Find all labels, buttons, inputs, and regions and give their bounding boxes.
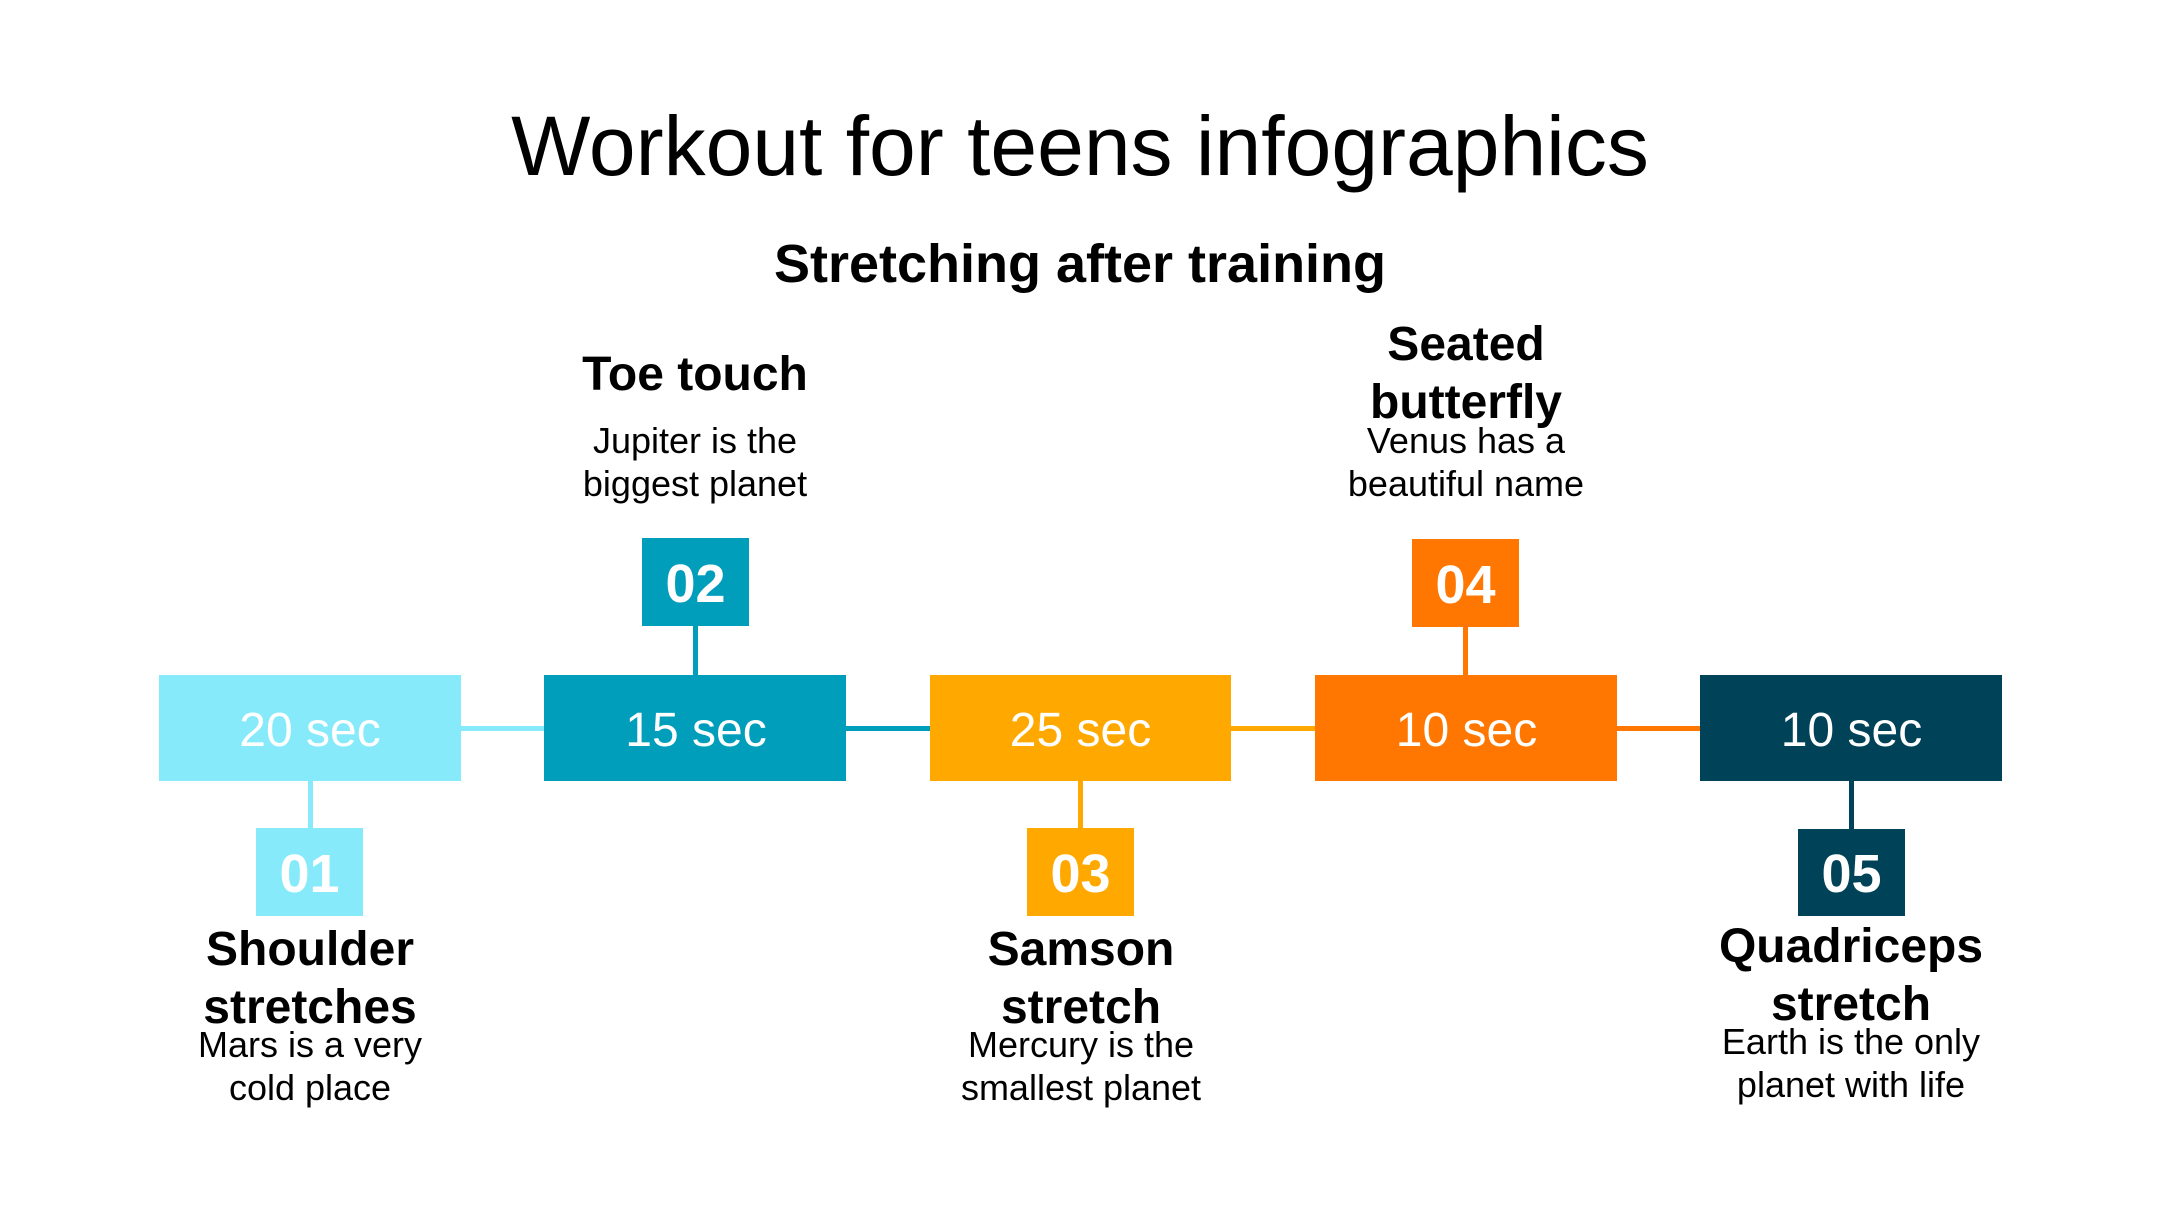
number box: 04: 04 — [1435, 555, 1496, 615]
connector: step 3 to step 4 — [1231, 726, 1315, 730]
text: jupiter: Jupiter is the — [593, 420, 797, 461]
connector: duration to number 03 — [1078, 781, 1083, 828]
title: Workout for teens infographics — [511, 99, 1649, 193]
panel: step 03 samson stretch — [930, 675, 1231, 1108]
duration box: 25 sec: 25 sec — [1010, 704, 1151, 757]
duration box: 20 sec — [159, 675, 461, 781]
duration box: 10 sec: 10 sec — [1781, 704, 1922, 757]
duration box: 20 sec: 20 sec — [239, 704, 381, 757]
text: venus — [1348, 420, 1584, 504]
panel: step 05 quadriceps stretch — [1700, 675, 2002, 1104]
connector: duration to number 05 — [1849, 781, 1854, 829]
text: venus: Venus has a — [1367, 420, 1565, 460]
connector: duration to number 01 — [308, 781, 312, 828]
connector: step 4 to step 5 — [1617, 726, 1700, 730]
duration box: 10 sec — [1315, 675, 1617, 781]
heading: samson stretch: Samson — [988, 923, 1174, 976]
panel: step 02 toe touch — [544, 348, 846, 781]
text: earth: Earth is the only — [1722, 1020, 1980, 1062]
connector: step 1 to step 2 — [461, 726, 544, 730]
text: mercury: Mercury is the — [968, 1024, 1194, 1065]
heading: seated butterfly: Seated — [1387, 318, 1545, 371]
duration box: 15 sec — [544, 675, 846, 781]
subtitle: Stretching after training — [774, 234, 1386, 294]
heading: samson stretch — [988, 923, 1174, 1034]
number box: 05 — [1798, 829, 1905, 916]
number box: 01 — [256, 828, 363, 916]
heading: quadriceps stretch — [1719, 920, 1983, 1031]
text: earth: planet with life — [1737, 1064, 1965, 1104]
connector: number 02 to duration — [693, 626, 698, 675]
number box: 02: 02 — [665, 554, 726, 614]
duration box: 25 sec — [930, 675, 1231, 781]
heading: seated butterfly: butterfly — [1370, 376, 1562, 429]
text: mars: cold place — [229, 1067, 391, 1108]
text: venus: beautiful name — [1348, 462, 1584, 504]
duration box: 10 sec: 10 sec — [1396, 704, 1537, 757]
heading: shoulder stretches: Shoulder — [206, 923, 414, 976]
duration box: 10 sec — [1700, 675, 2002, 781]
heading: samson stretch: stretch — [1001, 981, 1161, 1034]
panel: step 04 seated butterfly — [1315, 318, 1617, 781]
number box: 04 — [1412, 539, 1519, 627]
text: mercury — [961, 1024, 1201, 1108]
heading: shoulder stretches: stretches — [203, 981, 417, 1034]
heading: seated butterfly — [1370, 318, 1562, 429]
text: jupiter: biggest planet — [583, 463, 807, 504]
text: mercury: smallest planet — [961, 1067, 1201, 1108]
text: jupiter — [583, 420, 807, 504]
heading: quadriceps stretch: Quadriceps — [1719, 920, 1983, 973]
number box: 05: 05 — [1821, 844, 1882, 904]
heading: shoulder stretches — [203, 923, 417, 1034]
number box: 01: 01 — [279, 844, 340, 904]
number box: 03: 03 — [1050, 844, 1111, 904]
connector: step 2 to step 3 — [846, 726, 930, 730]
text: earth — [1722, 1020, 1980, 1104]
heading: toe touch: Toe touch — [582, 348, 808, 401]
connector: number 04 to duration — [1463, 627, 1468, 675]
text: mars: Mars is a very — [198, 1024, 422, 1065]
number box: 03 — [1027, 828, 1134, 916]
text: mars — [198, 1024, 422, 1108]
duration box: 15 sec: 15 sec — [625, 704, 767, 757]
heading: quadriceps stretch: stretch — [1771, 978, 1931, 1031]
number box: 02 — [642, 538, 749, 626]
panel: step 01 shoulder stretches — [159, 675, 461, 1108]
